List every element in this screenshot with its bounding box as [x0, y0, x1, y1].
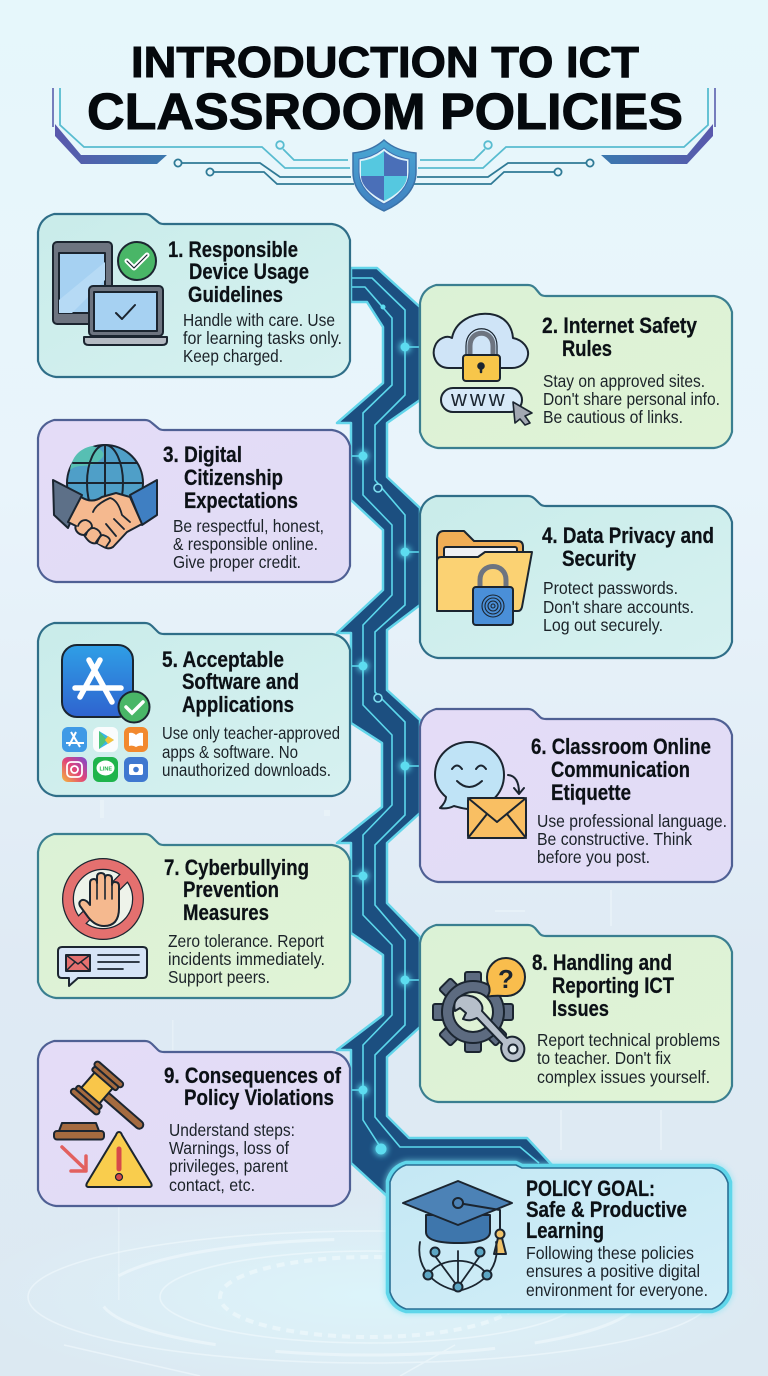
heading	[532, 950, 674, 1021]
heading: Communication	[551, 757, 690, 782]
heading: Prevention	[183, 877, 279, 902]
heading: Security	[562, 546, 636, 571]
body text: Report technical problems	[537, 1030, 720, 1050]
body text	[543, 578, 694, 635]
body text	[537, 1030, 720, 1087]
icons: app grid	[62, 727, 148, 782]
heading	[526, 1176, 687, 1243]
icon label: www: www	[450, 386, 508, 411]
heading: Expectations	[184, 488, 298, 513]
body text	[173, 516, 324, 572]
body text: Use professional language.	[537, 811, 727, 831]
icon: shield	[353, 140, 416, 211]
body text: Be constructive. Think	[537, 829, 692, 849]
heading: Safe & Productive	[526, 1197, 687, 1222]
heading	[164, 855, 309, 925]
body text: Following these policies	[526, 1243, 694, 1263]
body text: incidents immediately.	[168, 949, 325, 969]
heading: 3. Digital	[163, 442, 242, 467]
title frame with circuit lines	[53, 88, 715, 184]
title	[87, 38, 683, 140]
body text: Handle with care. Use	[183, 310, 335, 330]
heading: 4. Data Privacy and	[542, 523, 714, 548]
body text	[537, 811, 727, 867]
heading: 7. Cyberbullying	[164, 855, 309, 880]
body text: Log out securely.	[543, 615, 663, 635]
heading: Reporting ICT	[552, 973, 674, 998]
panel: 7 cyberbullying	[38, 834, 350, 998]
heading	[162, 647, 299, 717]
panel: 3 digital citizenship	[38, 420, 350, 582]
heading: 9. Consequences of	[164, 1063, 341, 1088]
icon label: question mark: ?	[498, 964, 514, 994]
panel: policy goal	[388, 1163, 730, 1311]
heading: Device Usage	[189, 259, 309, 284]
icon: app store	[62, 645, 150, 722]
body text: Use only teacher-approved	[162, 723, 340, 743]
body text: privileges, parent	[169, 1156, 288, 1176]
icon: tablet and laptop	[53, 242, 167, 345]
panel: 5 acceptable software	[38, 623, 350, 796]
panel: 2 internet safety	[420, 285, 732, 448]
body text	[526, 1243, 708, 1300]
body text: environment for everyone.	[526, 1280, 708, 1300]
heading: Issues	[552, 996, 609, 1021]
heading: Guidelines	[188, 282, 283, 307]
heading: POLICY GOAL:	[526, 1176, 655, 1201]
heading: Etiquette	[551, 780, 631, 805]
body text: Support peers.	[168, 967, 270, 987]
body text: & responsible online.	[173, 534, 318, 554]
body text: Stay on approved sites.	[543, 371, 705, 391]
title: CLASSROOM POLICIES	[87, 83, 683, 140]
icon: chat bubble and envelope	[435, 742, 526, 838]
body text: Understand steps:	[169, 1120, 295, 1140]
body text: Don't share personal info.	[543, 389, 720, 409]
panel: 8 handling ict issues	[420, 925, 732, 1102]
heading: Measures	[183, 900, 269, 925]
heading	[163, 442, 298, 513]
icons: app grid: LINE	[100, 766, 112, 772]
body text: to teacher. Don't fix	[537, 1048, 671, 1068]
icon: folder and fingerprint lock	[437, 531, 532, 625]
circuit nodes	[351, 304, 420, 1156]
body text: Protect passwords.	[543, 578, 678, 598]
icon: stop hand and message	[58, 864, 147, 986]
body text: complex issues yourself.	[537, 1067, 710, 1087]
body text	[183, 310, 342, 366]
body text: for learning tasks only.	[183, 328, 342, 348]
heading: 6. Classroom Online	[531, 734, 711, 759]
body text: Give proper credit.	[173, 552, 301, 572]
icon: gear wrench and question	[433, 958, 525, 1061]
body text: Warnings, loss of	[169, 1138, 289, 1158]
title: INTRODUCTION TO ICT	[131, 38, 639, 87]
heading	[542, 523, 714, 571]
icon: graduation cap and network	[403, 1181, 512, 1292]
heading: Policy Violations	[184, 1085, 334, 1110]
icon: gavel and warning	[54, 1060, 156, 1187]
icon: cloud lock and www	[434, 314, 532, 425]
body text: Keep charged.	[183, 346, 283, 366]
panel: 1 responsible device usage	[38, 214, 350, 377]
heading	[168, 237, 309, 307]
panel: 9 consequences	[38, 1041, 350, 1206]
heading: 2. Internet Safety	[542, 313, 697, 338]
body text: Be cautious of links.	[543, 407, 683, 427]
heading	[542, 313, 697, 361]
heading: 1. Responsible	[168, 237, 298, 262]
circuit trunk	[337, 268, 552, 1200]
panel: 6 online communication	[420, 709, 732, 882]
body text: contact, etc.	[169, 1175, 255, 1195]
heading: 5. Acceptable	[162, 647, 284, 672]
body text: apps & software. No	[162, 742, 298, 762]
body text: Be respectful, honest,	[173, 516, 324, 536]
heading: Rules	[562, 336, 612, 361]
body text: before you post.	[537, 847, 650, 867]
heading: Citizenship	[184, 465, 283, 490]
heading: Learning	[526, 1218, 604, 1243]
heading	[164, 1063, 341, 1110]
heading: Applications	[182, 692, 294, 717]
heading: 8. Handling and	[532, 950, 672, 975]
body text	[543, 371, 720, 427]
body text	[168, 931, 325, 987]
body text	[162, 723, 340, 780]
heading	[531, 734, 711, 805]
icon: globe and handshake	[53, 445, 157, 548]
panel: 4 data privacy	[420, 496, 732, 658]
body text: Don't share accounts.	[543, 597, 694, 617]
body text	[169, 1120, 295, 1195]
body text: unauthorized downloads.	[162, 760, 331, 780]
body text: Zero tolerance. Report	[168, 931, 324, 951]
body text: ensures a positive digital	[526, 1261, 700, 1281]
heading: Software and	[182, 669, 299, 694]
